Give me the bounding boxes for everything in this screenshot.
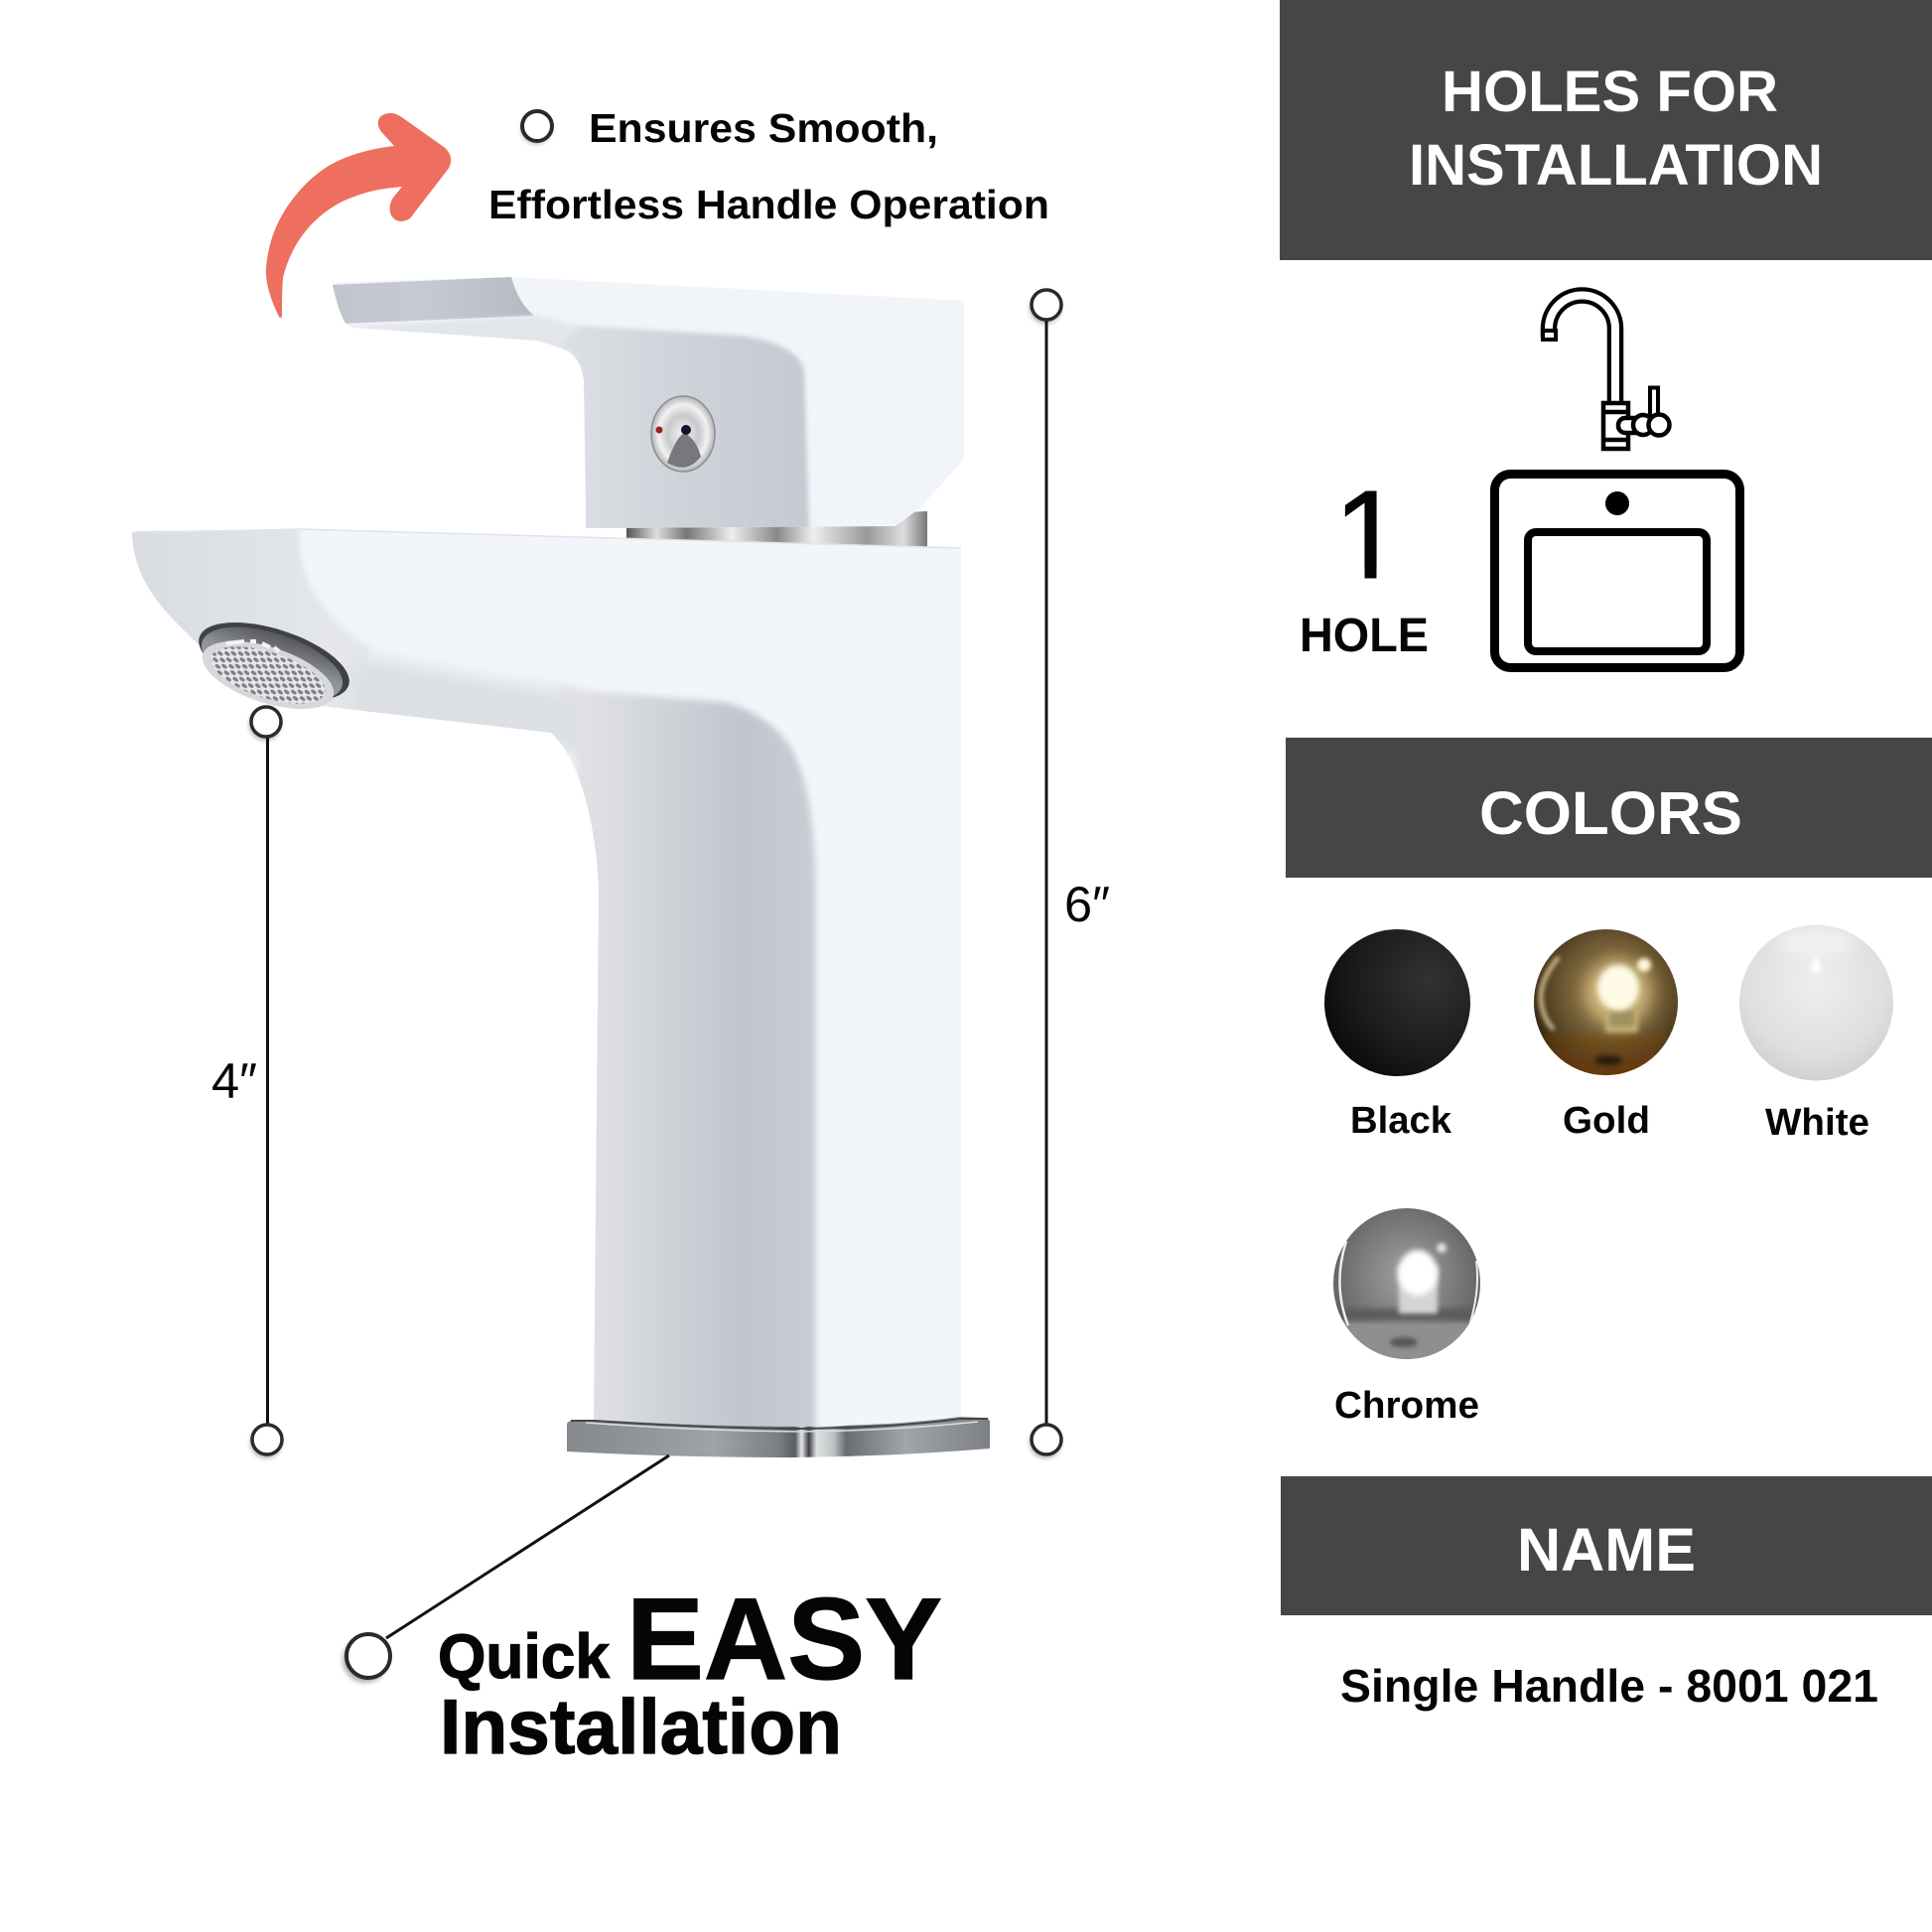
colour swatch: black: Black bbox=[1350, 1100, 1452, 1142]
icon: gooseneck faucet bbox=[1543, 296, 1670, 449]
panel: name header: NAME bbox=[1517, 1516, 1696, 1584]
icon: sink with one hole bbox=[1495, 475, 1739, 667]
aerator bbox=[190, 607, 358, 723]
callout ring bbox=[521, 111, 552, 144]
chrome collar under handle bbox=[626, 511, 927, 548]
dimension: total height 6 inch: 6″ bbox=[1064, 877, 1110, 932]
colour swatch: black bbox=[1324, 929, 1470, 1142]
one hole label: 1 bbox=[1333, 465, 1403, 605]
callout: quick easy installation bbox=[343, 1455, 942, 1770]
panel: colors header bbox=[1286, 738, 1932, 878]
colour swatch: chrome bbox=[1330, 1208, 1484, 1427]
handle temperature knob bbox=[651, 396, 715, 472]
callout: handle operation bbox=[488, 105, 1049, 227]
product name: Single Handle - 8001 021 bbox=[1340, 1660, 1878, 1712]
dimension: spout height 4 inch: 4″ bbox=[211, 1053, 257, 1109]
faucet body and spout bbox=[119, 526, 961, 1440]
dimension: spout height 4 inch bbox=[211, 707, 282, 1458]
callout: handle operation: Effortless Handle Operation bbox=[488, 182, 1049, 227]
colour swatch: chrome: Chrome bbox=[1334, 1385, 1479, 1427]
colour swatch: gold: Gold bbox=[1563, 1100, 1650, 1142]
panel: holes for installation header: INSTALLATION bbox=[1409, 133, 1823, 198]
red arrow bbox=[266, 113, 451, 318]
colour swatch: gold bbox=[1534, 929, 1678, 1134]
callout: quick easy installation: Installation bbox=[440, 1683, 842, 1770]
panel: colors header: COLORS bbox=[1479, 779, 1742, 847]
panel: name header bbox=[1281, 1476, 1932, 1615]
dimension: total height 6 inch bbox=[1030, 290, 1110, 1458]
faucet handle bbox=[331, 277, 964, 532]
panel: holes for installation header: HOLES FOR bbox=[1442, 60, 1778, 124]
one hole label: HOLE bbox=[1300, 610, 1429, 662]
callout: quick easy installation: Quick bbox=[438, 1622, 611, 1692]
one hole label bbox=[1303, 490, 1428, 651]
colour swatch: white bbox=[1739, 925, 1893, 1144]
panel: holes for installation header bbox=[1280, 0, 1932, 260]
callout: quick easy installation: EASY bbox=[626, 1574, 942, 1704]
callout text: Ensures Smooth, bbox=[589, 105, 938, 151]
colour swatch: white: White bbox=[1765, 1102, 1869, 1144]
base plate bbox=[567, 1417, 990, 1457]
faucet product image bbox=[119, 277, 990, 1457]
